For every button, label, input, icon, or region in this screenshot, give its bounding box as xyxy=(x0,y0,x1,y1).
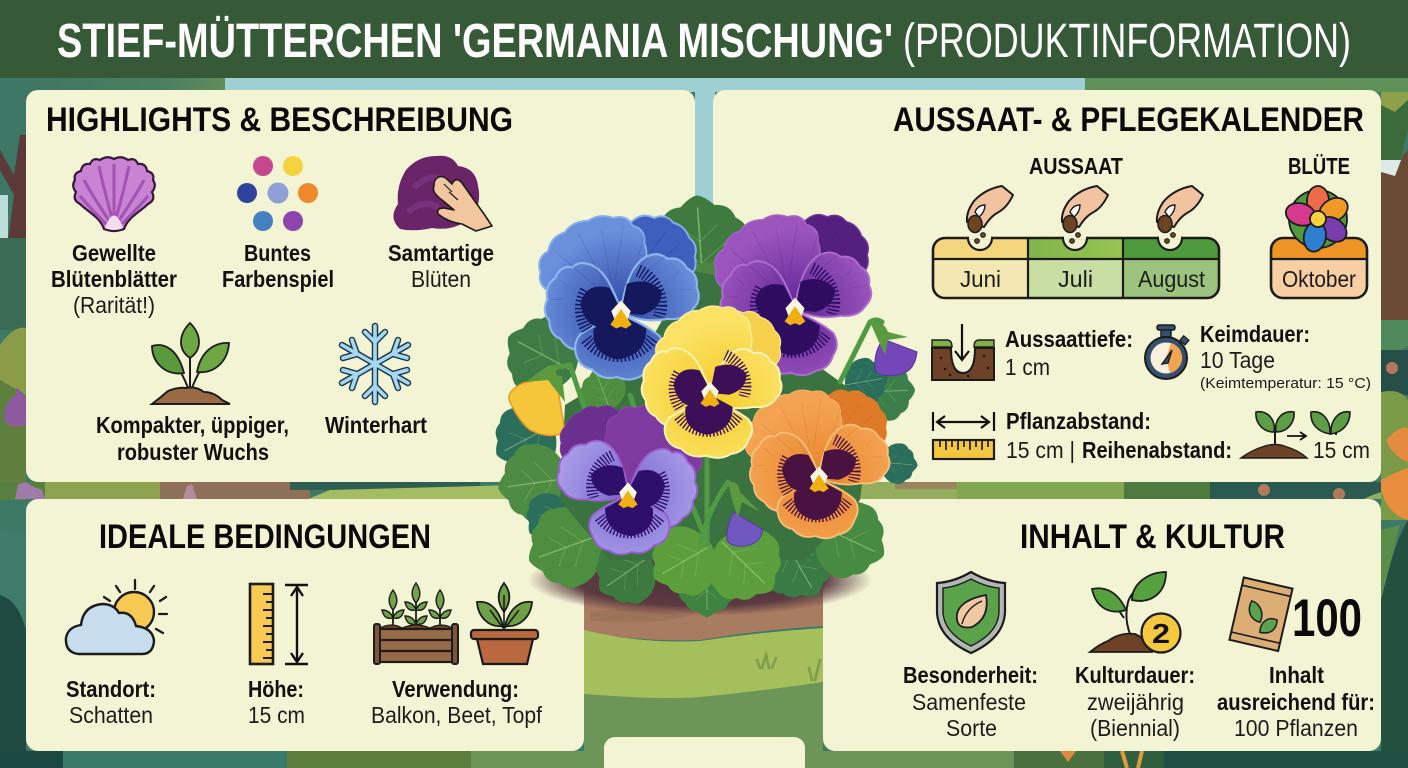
label: gewellte blütenblätter: Gewellte xyxy=(72,240,156,266)
panel: highlights xyxy=(26,90,695,482)
label: höhe: Höhe: xyxy=(248,676,304,702)
label: buntes farbenspiel: Farbenspiel xyxy=(222,266,334,292)
label: kulturdauer: zweijährig xyxy=(1087,689,1184,715)
label: verwendung: Balkon, Beet, Topf xyxy=(371,702,543,728)
icon: seed shield xyxy=(937,572,1005,653)
label: juli: Juli xyxy=(1058,266,1093,292)
label: besonderheit xyxy=(903,662,1038,741)
panel: ideal conditions xyxy=(26,499,584,751)
label: kompakter wuchs: robuster Wuchs xyxy=(117,439,269,465)
calendar: sowing months xyxy=(933,238,1219,298)
label: samtartige blüten: Samtartige xyxy=(388,240,494,266)
icon: sowing depth soil xyxy=(932,324,994,380)
icon: spacing arrow xyxy=(933,412,994,431)
label: blüte: BLÜTE xyxy=(1288,153,1350,179)
label: pflanzabstand: Reihenabstand: xyxy=(1082,437,1232,463)
label: standort: Standort: xyxy=(66,676,156,702)
icon: yellow ruler xyxy=(933,440,994,459)
bud: purple xyxy=(870,321,917,376)
icon: bloom flower xyxy=(1283,186,1352,253)
label: standort: Schatten xyxy=(69,702,153,728)
flower: purple pansy xyxy=(715,215,871,375)
label: aussaat: AUSSAAT xyxy=(1029,153,1123,179)
label: aussaattiefe: 1 cm xyxy=(1005,354,1050,380)
label: höhe: 15 cm xyxy=(248,702,305,728)
label: standort xyxy=(66,676,156,728)
label: höhe xyxy=(248,676,305,728)
icon: colour dots xyxy=(237,156,318,231)
label: pflanzabstand: Pflanzabstand: xyxy=(1006,408,1151,434)
label: inhalt: Inhalt xyxy=(1269,662,1324,688)
gutter right xyxy=(820,482,960,499)
label: kulturdauer: (Biennial) xyxy=(1090,715,1180,741)
calendar: bloom month xyxy=(1271,238,1367,298)
label: oktober: Oktober xyxy=(1282,266,1356,292)
label: verwendung: Verwendung: xyxy=(392,676,519,702)
icon: hand sowing august xyxy=(1157,186,1203,243)
gutter left xyxy=(0,482,45,499)
panel: content and culture xyxy=(823,499,1381,751)
icon: hand sowing july xyxy=(1062,186,1108,243)
label: kompakter wuchs: Kompakter, üppiger, xyxy=(96,412,289,438)
label: number 100: 100 xyxy=(1292,589,1362,648)
label: aussaattiefe: Aussaattiefe: xyxy=(1005,326,1133,352)
flower: orange pansy xyxy=(745,390,890,538)
label: pflanzabstand: 15 cm | xyxy=(1006,437,1075,463)
bottom strip xyxy=(0,751,63,768)
heading: content and culture: INHALT & KULTUR xyxy=(1020,518,1285,556)
label: coin 2: 2 xyxy=(1152,618,1170,649)
heading: highlights: HIGHLIGHTS & BESCHREIBUNG xyxy=(46,101,513,139)
icon: wavy petal xyxy=(73,157,155,231)
label: gewellte blütenblätter xyxy=(51,240,177,318)
leaves xyxy=(480,192,919,618)
icon: snowflake xyxy=(342,326,408,402)
label: aussaattiefe xyxy=(1005,326,1133,380)
icon: raised bed xyxy=(374,583,458,664)
label: verwendung xyxy=(371,676,543,728)
label: winterhart: Winterhart xyxy=(325,412,427,438)
label: august: August xyxy=(1138,266,1206,292)
label: inhalt: ausreichend für: xyxy=(1217,689,1375,715)
label: juni: Juni xyxy=(960,266,1001,292)
front leaves xyxy=(573,361,799,619)
icon: row spacing seedlings xyxy=(1241,412,1350,458)
illustration: pansy plant xyxy=(480,192,919,619)
label: pflanzabstand: 15 cm xyxy=(1313,437,1370,463)
soil shadow xyxy=(528,544,872,616)
header banner xyxy=(0,0,1408,78)
icon: flower pot xyxy=(471,583,538,664)
label: samtartige blüten xyxy=(388,240,494,292)
label: keimdauer: (Keimtemperatur: 15 °C) xyxy=(1200,375,1371,392)
label: kulturdauer: Kulturdauer: xyxy=(1075,662,1195,688)
label: gewellte blütenblätter: Blütenblätter xyxy=(51,266,177,292)
panel: bottom centre tab xyxy=(604,737,805,768)
centre ground xyxy=(584,575,823,640)
bud: small violet xyxy=(727,482,763,546)
label: besonderheit: Samenfeste xyxy=(912,689,1026,715)
icon: stopwatch xyxy=(1145,325,1189,379)
label: gewellte blütenblätter: (Rarität!) xyxy=(73,292,155,318)
label: inhalt xyxy=(1217,662,1375,741)
bud: yellow xyxy=(509,365,565,436)
label: samtartige blüten: Blüten xyxy=(411,266,471,292)
label: buntes farbenspiel: Buntes xyxy=(244,240,311,266)
icon: height ruler xyxy=(250,584,308,664)
title: STIEF-MÜTTERCHEN 'GERMANIA MISCHUNG' xyxy=(57,15,893,68)
stems xyxy=(552,320,882,545)
flower: blue pansy xyxy=(539,216,699,380)
foliage mass behind flowers xyxy=(560,270,872,560)
icon: velvet petal with hand xyxy=(393,156,492,231)
right edge xyxy=(1381,78,1408,108)
label: inhalt: 100 Pflanzen xyxy=(1234,715,1358,741)
label: keimdauer: 10 Tage xyxy=(1200,347,1275,373)
heading: ideal conditions: IDEALE BEDINGUNGEN xyxy=(99,518,431,556)
label: keimdauer xyxy=(1200,321,1371,392)
icon: cloud and sun xyxy=(66,580,167,654)
icon: sprout with two-year coin xyxy=(1090,572,1180,652)
label: besonderheit: Besonderheit: xyxy=(903,662,1038,688)
icon: hand sowing june xyxy=(967,186,1013,243)
icon: seed packet xyxy=(1229,577,1293,651)
label: kulturdauer xyxy=(1075,662,1195,741)
label: besonderheit: Sorte xyxy=(946,715,997,741)
label: pflanzabstand xyxy=(1006,408,1370,463)
panel: sowing and care calendar xyxy=(713,90,1381,482)
label: kompakter wuchs xyxy=(96,412,289,465)
flower: yellow pansy xyxy=(642,306,782,458)
label: buntes farbenspiel xyxy=(222,240,334,292)
flower: violet pansy xyxy=(557,406,702,554)
icon: sprout xyxy=(152,323,230,404)
label: keimdauer: Keimdauer: xyxy=(1200,321,1310,347)
